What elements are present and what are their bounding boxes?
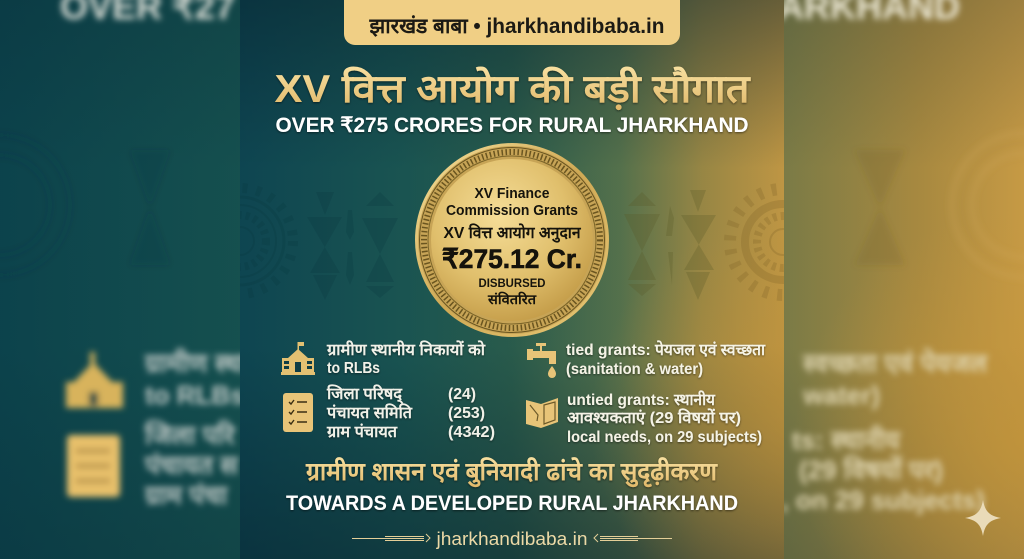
list: panchayat counts: (4342) xyxy=(448,424,495,441)
coin text: XV Finance xyxy=(474,186,550,202)
text: untied grants xyxy=(567,390,762,446)
title: XV वित्त आयोग की बड़ी सौगात xyxy=(274,66,751,111)
main poster panel xyxy=(240,0,784,559)
coin text: ₹275.12 Cr. xyxy=(442,244,582,274)
subtitle: OVER ₹275 CRORES FOR RURAL JHARKHAND xyxy=(276,114,748,137)
footer website xyxy=(352,529,672,549)
blurred background left and right: to RLBs xyxy=(145,380,245,410)
header tab xyxy=(344,0,680,45)
blurred background left and right: जिला परि xyxy=(144,420,236,450)
list: panchayat counts: जिला परिषद् xyxy=(326,384,404,405)
blurred background left and right: स्वच्छता एवं पेयजल xyxy=(802,348,988,378)
blurred background left and right: , on 29 subjects) xyxy=(781,485,985,515)
text: untied grants: untied grants: स्थानीय xyxy=(567,390,716,409)
list: panchayat counts xyxy=(326,384,495,441)
icon: sparkle watermark xyxy=(965,500,1001,536)
icon: water tap xyxy=(527,343,556,378)
footer website: jharkhandibaba.in xyxy=(435,529,588,549)
icon: checklist xyxy=(283,393,313,432)
closing english heading: TOWARDS A DEVELOPED RURAL JHARKHAND xyxy=(286,492,738,515)
blurred background left and right: ts: स्थानीय xyxy=(792,425,901,455)
list: panchayat counts: पंचायत समिति xyxy=(326,403,413,422)
header tab: झारखंड बाबा • jharkhandibaba.in xyxy=(369,15,664,38)
coin text: XV वित्त आयोग अनुदान xyxy=(444,223,582,243)
list: panchayat counts: ग्राम पंचायत xyxy=(326,423,398,441)
text: rural local bodies: to RLBs xyxy=(327,360,380,377)
list: panchayat counts: (24) xyxy=(448,386,476,403)
text: untied grants: आवश्यकताएं (29 विषयों पर) xyxy=(567,408,741,427)
text: tied grants: (sanitation & water) xyxy=(566,361,703,378)
closing hindi heading: ग्रामीण शासन एवं बुनियादी ढांचे का सुदृढ़ीकरण xyxy=(305,457,718,488)
blurred background left and right: ग्रामीण स्था xyxy=(144,348,249,378)
list: panchayat counts: (253) xyxy=(448,405,485,422)
blurred background left and right: water) xyxy=(802,380,880,410)
gold coin xyxy=(415,143,609,337)
coin text xyxy=(442,186,582,307)
text: tied grants xyxy=(566,340,766,378)
coin text: संवितरित xyxy=(487,291,537,307)
coin text: DISBURSED xyxy=(478,276,546,290)
blurred background left and right: (29 विषयों पर) xyxy=(799,455,943,485)
tribal motifs background xyxy=(624,184,784,301)
blurred background left and right: पंचायत स xyxy=(144,450,239,480)
text: untied grants: local needs, on 29 subjects) xyxy=(567,429,762,446)
icon: village hall xyxy=(281,342,315,375)
text: tied grants: tied grants: पेयजल एवं स्वच्छता xyxy=(566,340,766,359)
coin text: Commission Grants xyxy=(446,203,578,219)
text: rural local bodies xyxy=(326,340,486,377)
text: rural local bodies: ग्रामीण स्थानीय निकायों को xyxy=(326,340,486,359)
icon: open map xyxy=(526,398,558,428)
blurred background left and right: ग्राम पंचा xyxy=(144,480,228,510)
